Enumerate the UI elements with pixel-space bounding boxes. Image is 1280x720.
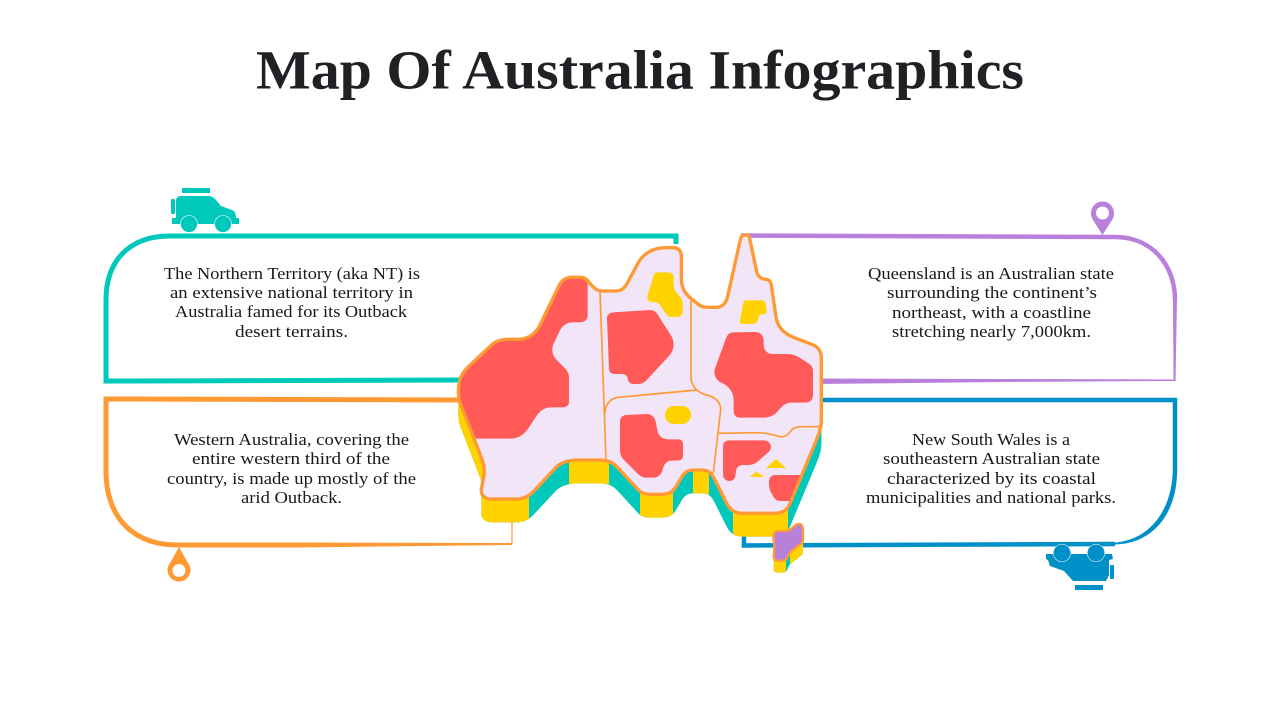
text: Northern Territory: an extensive national territory in [170, 283, 414, 302]
orange frame [106, 399, 512, 548]
map of Australia [450, 235, 821, 573]
text: Queensland [868, 264, 1114, 341]
map base land [458, 235, 821, 513]
red region: South Australia [620, 414, 683, 478]
map extrusion [458, 402, 822, 537]
Tasmania [773, 524, 803, 573]
yellow region: Cape York [740, 300, 767, 324]
red region: Northern Territory [607, 310, 674, 384]
map outline [458, 235, 821, 513]
text: Western Australia: entire western third of the [192, 449, 390, 468]
text: Western Australia: Western Australia, covering the [174, 430, 409, 449]
state borders [600, 291, 820, 473]
yellow region: pill [665, 406, 691, 424]
text: New South Wales: southeastern Australian state [883, 449, 1100, 468]
icon: jeep [171, 188, 239, 233]
panel: Northern Territory [106, 188, 676, 381]
text: Queensland: Queensland is an Australian state [868, 264, 1114, 283]
teal frame [106, 236, 676, 381]
text: New South Wales: municipalities and national parks. [866, 488, 1116, 507]
text: Western Australia [167, 430, 416, 507]
panel: Queensland [741, 202, 1177, 384]
text: Northern Territory: The Northern Territory (aka NT) is [164, 264, 420, 283]
text: Northern Territory: desert terrains. [235, 322, 348, 341]
text: Queensland: surrounding the continent’s [887, 283, 1097, 302]
icon: purple map pin [1091, 202, 1114, 235]
red region: Victoria [769, 475, 800, 501]
text: New South Wales: characterized by its coastal [887, 469, 1096, 488]
text: Western Australia: country, is made up mostly of the [167, 469, 416, 488]
text: Northern Territory: Australia famed for its Outback [175, 302, 408, 321]
panel: New South Wales [744, 400, 1177, 590]
text: Queensland: northeast, with a coastline [892, 303, 1091, 322]
text: Western Australia: arid Outback. [241, 488, 342, 507]
text: New South Wales: New South Wales is a [912, 430, 1071, 449]
red region: Queensland [714, 332, 813, 418]
text: New South Wales [866, 430, 1116, 507]
text: Queensland: stretching nearly 7,000km. [892, 322, 1091, 341]
title: Map Of Australia Infographics [256, 40, 1024, 100]
icon: video camera [1046, 544, 1114, 590]
blue frame [744, 400, 1177, 546]
purple frame [741, 236, 1177, 384]
red region: Western Australia [450, 275, 588, 439]
red region: New South Wales [723, 440, 771, 481]
panel: Western Australia [106, 399, 512, 582]
yellow mountains [749, 459, 786, 477]
yellow region: Top End [647, 272, 683, 317]
text: Northern Territory [164, 264, 420, 341]
icon: orange drop pin [168, 547, 190, 582]
